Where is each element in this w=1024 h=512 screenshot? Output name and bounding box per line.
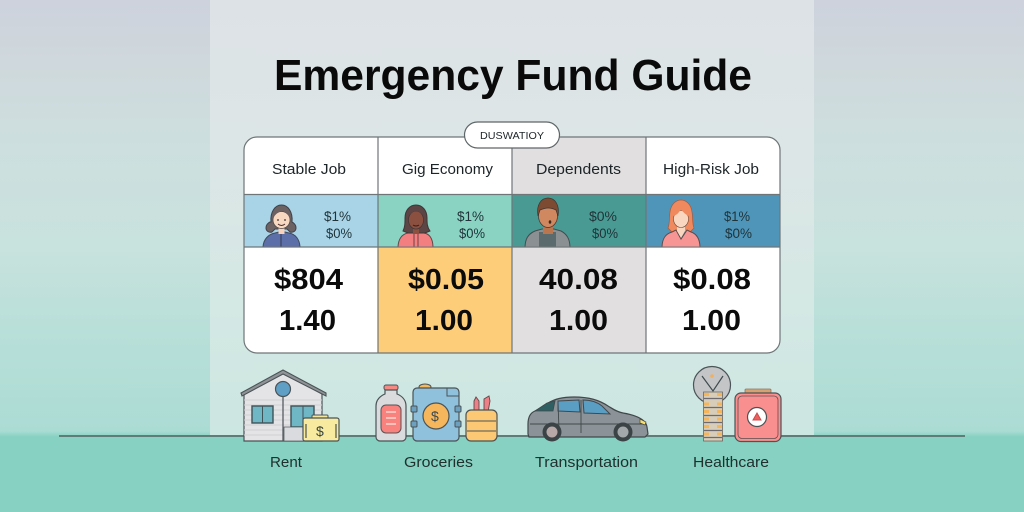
category labels: Groceries: [404, 455, 473, 471]
row fill: high-risk job band: [646, 194, 780, 247]
large values: 1.40: [279, 305, 336, 337]
large values: [274, 264, 751, 337]
icon: cash briefcase: $: [316, 423, 324, 439]
small rates: $1%: [724, 209, 750, 224]
person: dependents: [525, 198, 570, 248]
small rates: $0%: [459, 226, 485, 241]
large values: $0.08: [673, 264, 751, 296]
row fill: dependents band: [512, 194, 646, 247]
icon: car: [528, 397, 648, 442]
cell fill: gig economy values: [378, 247, 512, 352]
person: high-risk job: [662, 200, 700, 248]
column headers: [272, 161, 759, 178]
column fill: dependents header: [512, 138, 646, 194]
pill tag: DUSWATIOY: [480, 130, 544, 142]
table grid: [244, 137, 780, 353]
column headers: Dependents: [536, 161, 621, 178]
category labels: Rent: [270, 455, 302, 471]
large values: 1.00: [549, 305, 608, 337]
cell fill: dependents values: [512, 247, 646, 352]
person: stable job: [263, 205, 300, 248]
row fill: gig economy band: [378, 194, 512, 247]
category labels: [270, 455, 769, 471]
small rates: $0%: [725, 226, 752, 241]
small rates: $0%: [326, 226, 352, 241]
large values: 40.08: [539, 264, 618, 296]
icon: pencil jar: [466, 396, 497, 441]
icon: bottle: [376, 385, 406, 441]
small rates: $1%: [457, 209, 484, 224]
column headers: Gig Economy: [402, 161, 493, 178]
small rates: $1%: [324, 209, 351, 224]
small rates: $0%: [592, 226, 618, 241]
pill tag: [464, 122, 560, 148]
large values: $804: [274, 264, 343, 296]
category labels: Healthcare: [693, 455, 769, 471]
large values: $0.05: [408, 264, 484, 296]
title: Emergency Fund Guide: [274, 51, 752, 100]
icon: cash briefcase: [303, 415, 339, 441]
ground line: [59, 435, 965, 437]
icon: first aid box: [735, 389, 781, 442]
column headers: High-Risk Job: [663, 161, 759, 178]
comparison table: [244, 137, 780, 353]
row fill: stable job band: [244, 194, 378, 247]
icon: gauge stack: [694, 366, 730, 441]
icon: house: [241, 370, 326, 441]
small rates: [324, 209, 752, 241]
small rates: $0%: [589, 209, 617, 224]
large values: 1.00: [415, 305, 473, 337]
icon: coin box: [411, 384, 461, 441]
person: gig economy: [398, 205, 433, 248]
large values: 1.00: [682, 305, 741, 337]
category labels: Transportation: [535, 455, 638, 471]
column headers: Stable Job: [272, 161, 346, 178]
icon: coin box: $: [431, 408, 439, 424]
